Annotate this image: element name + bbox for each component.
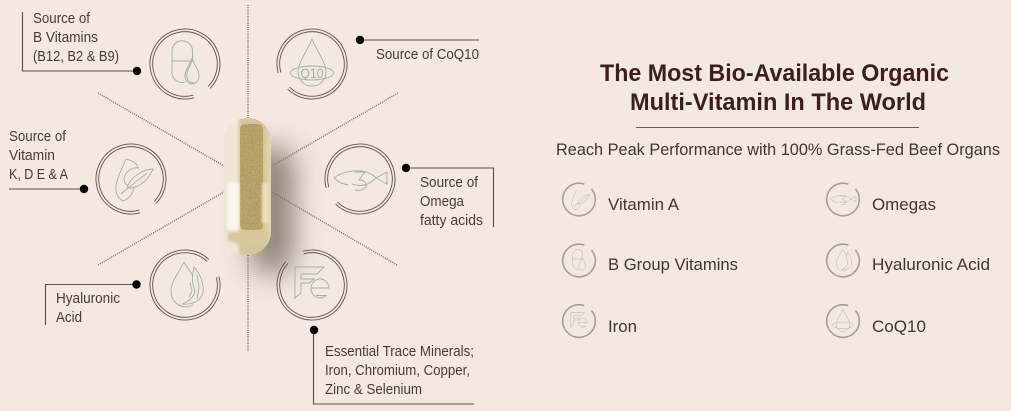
callout: B vitamins: Source of xyxy=(33,11,91,27)
list item: CoQ10: CoQ10 xyxy=(872,318,926,336)
callout: CoQ10 xyxy=(356,36,479,63)
title: Multi-Vitamin In The World xyxy=(630,89,926,116)
callout: vitamin K D E A: K, D E & A xyxy=(9,167,68,183)
list item: Iron xyxy=(556,298,637,344)
callout: omega fatty acids xyxy=(402,164,494,229)
list item: CoQ10 xyxy=(820,298,926,344)
callout: omega fatty acids: Source of xyxy=(420,175,479,191)
list item: Omegas: Omegas xyxy=(872,196,936,214)
callout: omega fatty acids: Omega xyxy=(420,194,465,210)
callout: CoQ10: Source of CoQ10 xyxy=(376,47,479,63)
callout: B vitamins xyxy=(22,11,141,75)
callout: hyaluronic acid xyxy=(46,280,141,326)
icon: Fe iron xyxy=(269,242,355,328)
list item: B Group Vitamins: B Group Vitamins xyxy=(608,256,738,274)
list item: B Group Vitamins xyxy=(556,238,738,283)
icon: hyaluronic drop and feather xyxy=(143,243,227,327)
callout: trace minerals: Zinc & Selenium xyxy=(325,382,422,398)
icon: CoQ10 drop xyxy=(269,21,355,107)
title: The Most Bio-Available Organic xyxy=(600,60,949,87)
subtitle: Reach Peak Performance with 100% Grass-Fed Beef Organs xyxy=(556,141,1000,159)
list item: Vitamin A: Vitamin A xyxy=(608,196,679,214)
callout: trace minerals: Iron, Chromium, Copper, xyxy=(325,363,470,379)
list item: Hyaluronic Acid: Hyaluronic Acid xyxy=(872,256,990,274)
list item: Iron: Iron xyxy=(608,318,637,336)
icon: B vitamins pill and drop xyxy=(142,21,228,107)
icon: fish omega 3 xyxy=(317,136,403,222)
callout: vitamin K D E A xyxy=(9,129,88,193)
callout: omega fatty acids: fatty acids xyxy=(420,213,483,229)
callout: B vitamins: (B12, B2 & B9) xyxy=(33,49,119,65)
capsule xyxy=(224,118,271,255)
list item: Hyaluronic Acid xyxy=(820,238,990,283)
callout: vitamin K D E A: Vitamin xyxy=(9,148,55,164)
list item: Omegas xyxy=(820,177,936,222)
icon: CoQ10 drop: Q10 xyxy=(300,65,324,81)
list item: Vitamin A xyxy=(556,177,679,222)
capsule shadow xyxy=(250,145,294,275)
callout: hyaluronic acid: Acid xyxy=(56,310,82,326)
callout: trace minerals xyxy=(310,326,474,404)
title xyxy=(600,60,949,116)
dotted radial lines xyxy=(98,5,398,352)
callout: trace minerals: Essential Trace Minerals; xyxy=(325,344,474,360)
callout: B vitamins: B Vitamins xyxy=(33,30,98,46)
callout: hyaluronic acid: Hyaluronic xyxy=(56,291,120,307)
icon: leaves xyxy=(88,136,174,222)
callout: vitamin K D E A: Source of xyxy=(9,129,67,145)
